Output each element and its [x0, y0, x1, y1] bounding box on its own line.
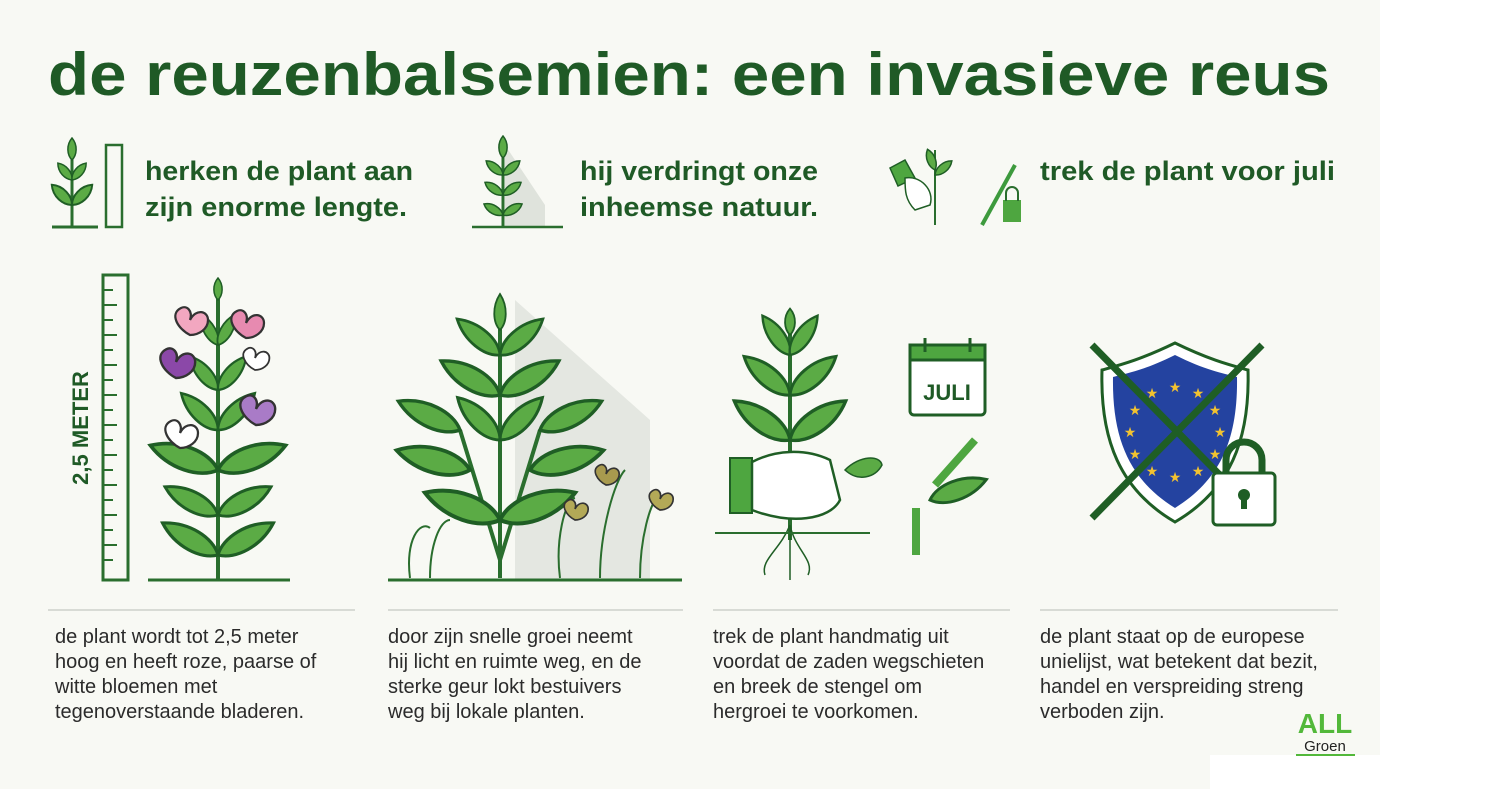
panel 3 illustration	[715, 309, 990, 580]
text: col 2: sterke geur lokt bestuivers	[388, 676, 621, 698]
icon: plant with ruler	[48, 138, 122, 227]
panel 4 illustration: ★	[1124, 424, 1136, 440]
panel 4 illustration: ★	[1129, 446, 1141, 462]
panel 4 illustration: ★	[1214, 424, 1226, 440]
text: col 1: hoog en heeft roze, paarse of	[55, 651, 317, 673]
plant with flowers	[146, 278, 290, 580]
heading: herken: herken de plant aan	[145, 156, 413, 186]
title: de reuzenbalsemien: een invasieve reus	[48, 41, 1330, 108]
text: col 3: voordat de zaden wegschieten	[713, 651, 984, 673]
panel 4 illustration: ★	[1146, 463, 1158, 479]
text: col 1: tegenoverstaande bladeren.	[55, 701, 304, 723]
label: 2,5 meter: 2,5 METER	[68, 371, 93, 485]
text: col 2: hij licht en ruimte weg, en de	[388, 651, 641, 673]
text: col 2: door zijn snelle groei neemt	[388, 626, 633, 648]
logo: ALL groen: ALL	[1298, 708, 1352, 739]
panel 4 illustration	[1092, 343, 1275, 525]
panel 4 illustration: ★	[1209, 446, 1221, 462]
heading: trek: trek de plant voor juli	[1040, 156, 1335, 186]
heading: verdringt: hij verdringt onze	[580, 156, 818, 186]
panel 4 illustration: ★	[1192, 463, 1204, 479]
text: col 4: handel en verspreiding streng	[1040, 676, 1304, 698]
panel 4 illustration: ★	[1129, 402, 1141, 418]
text: col 1: de plant wordt tot 2,5 meter	[55, 626, 299, 648]
text: col 4: unielijst, wat betekent dat bezit,	[1040, 651, 1318, 673]
heading: verdringt	[580, 156, 818, 222]
text: col 4: verboden zijn.	[1040, 701, 1165, 723]
icon: pulling hand	[890, 148, 1021, 225]
text: col 3: hergroei te voorkomen.	[713, 701, 919, 723]
broken stem	[916, 440, 990, 555]
icon: crowding plant	[472, 136, 563, 228]
panel 4 illustration: ★	[1209, 402, 1221, 418]
panel 4 illustration: ★	[1146, 385, 1158, 401]
text: col 3: trek de plant handmatig uit	[713, 626, 949, 648]
heading: herken	[145, 156, 413, 222]
heading: verdringt: inheemse natuur.	[580, 192, 818, 222]
panel 4 illustration: ★	[1169, 469, 1181, 485]
panel 2 illustration	[388, 294, 682, 580]
panel 1 illustration	[68, 275, 290, 580]
logo: ALL groen: Groen	[1304, 738, 1346, 755]
text: col 3: en breek de stengel om	[713, 676, 922, 698]
text: col 4: de plant staat op de europese	[1040, 626, 1305, 648]
panel 4 illustration: ★	[1192, 385, 1204, 401]
text: col 2: weg bij lokale planten.	[387, 701, 585, 723]
heading: herken: zijn enorme lengte.	[145, 192, 407, 222]
calendar JULI: JULI	[923, 380, 971, 405]
logo: ALL groen	[1296, 708, 1355, 755]
calendar JULI	[910, 338, 985, 415]
panel 4 illustration: ★	[1169, 379, 1181, 395]
ruler	[103, 275, 128, 580]
text: col 1: witte bloemen met	[54, 676, 218, 698]
